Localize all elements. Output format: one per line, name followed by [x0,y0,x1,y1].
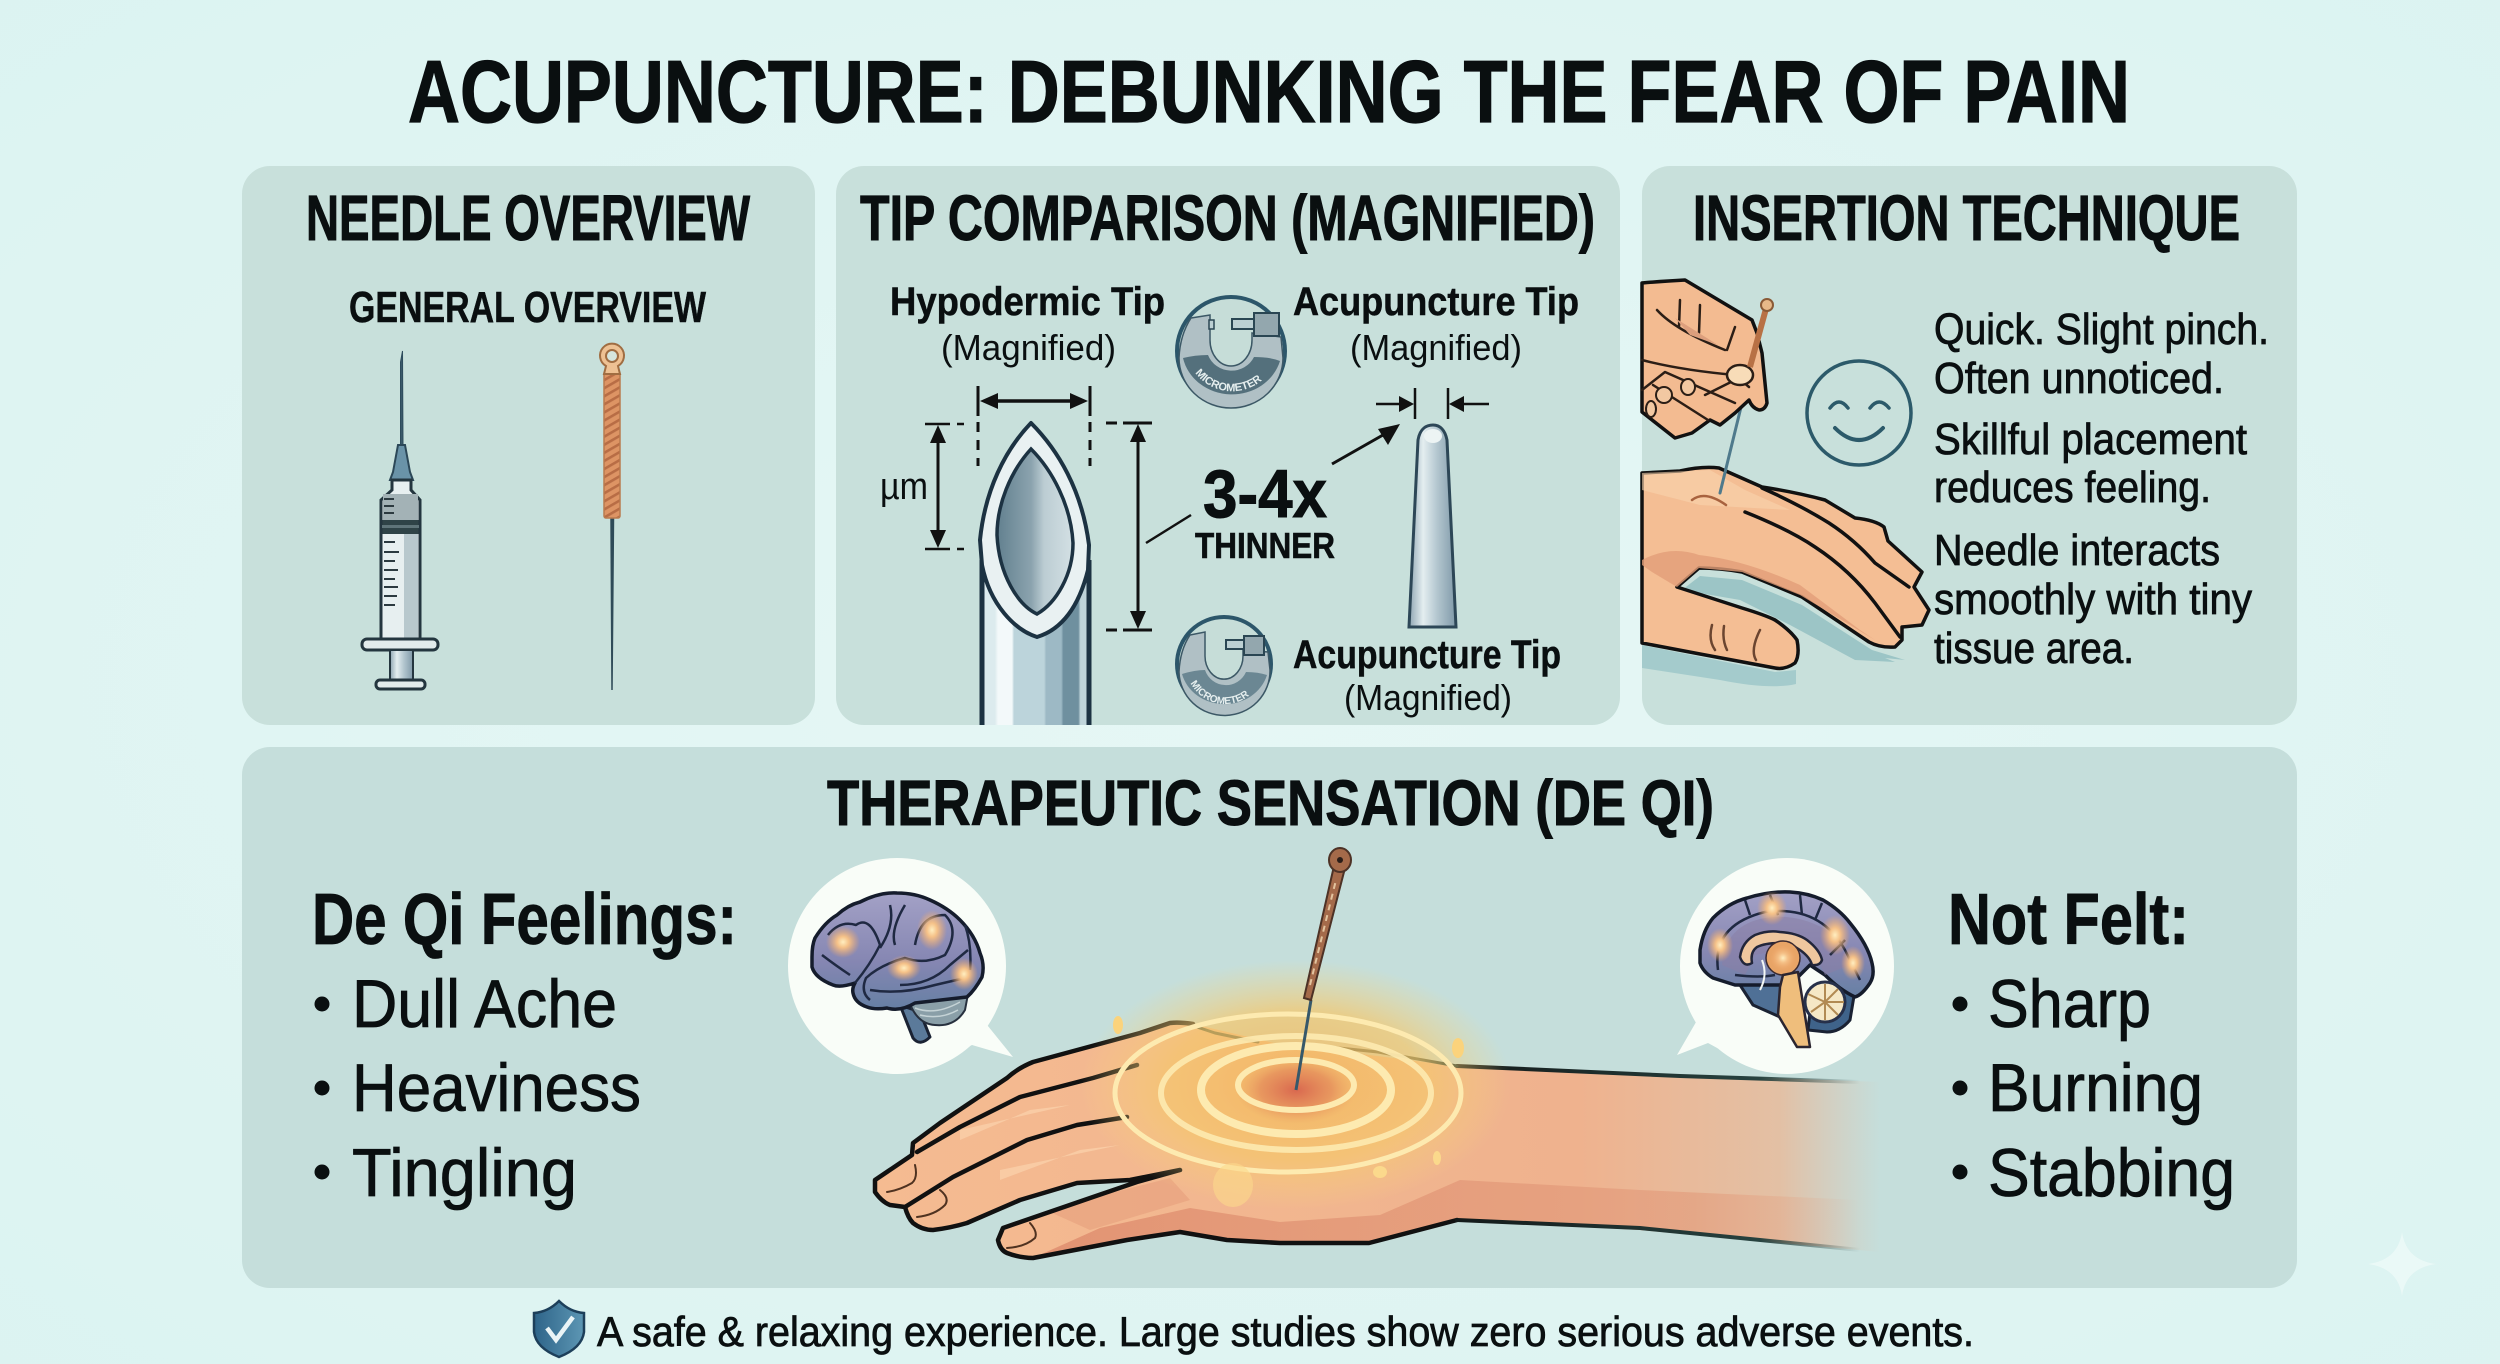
list: not felt: Stabbing [1988,1135,2235,1211]
list: not felt: Not Felt: [1948,880,2189,960]
title: ACUPUNCTURE: DEBUNKING THE FEAR OF PAIN [408,42,2130,141]
subheading: general overview: GENERAL OVERVIEW [349,283,706,332]
diagram: acupuncture needle tip [1409,425,1456,627]
text block: insertion points: Skillful placement [1934,415,2247,464]
panel: insertion technique [1642,166,2297,725]
text block: insertion points: Quick. Slight pinch. [1934,305,2269,354]
panel: needle overview [242,166,815,725]
dimension: acupuncture width [1376,388,1489,419]
heading: insertion technique: INSERTION TECHNIQUE [1693,182,2240,254]
list: de qi feelings: Dull Ache [352,966,617,1042]
label: acupuncture tip top: (Magnified) [1350,327,1522,368]
icon: syringe [362,351,438,689]
effect: glowing rings [1081,960,1511,1210]
list: de qi feelings [312,880,737,1211]
callout: 3-4x thinner: THINNER [1195,525,1335,566]
label: hypodermic tip [890,280,1165,368]
list: de qi feelings: De Qi Feelings: [312,880,737,960]
icon: acupuncture needle [600,344,624,690]
icon: micrometer bottom: MICROMETER [1190,680,1250,704]
list: not felt: Burning [1988,1050,2203,1126]
text block: insertion points: reduces feeling. [1934,463,2211,512]
icon: micrometer top [1175,295,1287,409]
diagram: hypodermic needle tip [980,423,1089,725]
icon: smiley face [1807,361,1911,465]
text block: insertion points: tissue area. [1934,624,2134,673]
label: acupuncture tip top [1293,280,1579,368]
label: acupuncture tip bottom: Acupuncture Tip [1293,633,1561,677]
callout: 3-4x thinner [1146,456,1335,566]
speech bubble: left brain [788,858,1013,1074]
label: hypodermic tip: (Magnified) [941,327,1116,368]
icon: micrometer bottom [1175,615,1273,716]
dimension: hypodermic width [978,386,1090,466]
label: hypodermic tip: Hypodermic Tip [890,280,1165,324]
panel: tip comparison [836,166,1620,725]
callout: 3-4x thinner: 3-4x [1203,456,1327,532]
arrow: to acupuncture tip [1332,424,1400,464]
icon: brain cross-section [1700,891,1873,1047]
text block: insertion points [1934,305,2269,673]
list: not felt: Sharp [1988,966,2151,1042]
icon: micrometer top: MICROMETER [1196,368,1262,392]
text block: insertion points: Often unnoticed. [1934,354,2224,403]
text block: insertion points: smoothly with tiny [1934,575,2252,624]
illustration: needle held in hand [1642,280,1773,493]
panel: therapeutic sensation [242,747,2297,1288]
footer note: A safe & relaxing experience. Large studies show zero serious adverse events. [597,1308,1974,1355]
illustration: forearm and hand [875,1023,1880,1258]
dimension: micrometre height: µm [880,466,928,508]
heading: needle overview: NEEDLE OVERVIEW [306,182,750,254]
watermark sparkle [2368,1232,2436,1296]
list: not felt [1948,880,2235,1211]
list: de qi feelings: Heaviness [352,1050,641,1126]
list: de qi feelings: Tingling [352,1135,577,1211]
dimension: right height [1106,423,1152,630]
icon: brain exterior [812,893,983,1042]
illustration: inserted needle [1296,848,1351,1090]
text block: insertion points: Needle interacts [1934,526,2220,575]
label: acupuncture tip bottom: (Magnified) [1344,677,1512,718]
heading: tip comparison: TIP COMPARISON (MAGNIFIED) [860,182,1595,254]
label: acupuncture tip top: Acupuncture Tip [1293,280,1579,324]
label: acupuncture tip bottom [1293,633,1561,718]
dimension: micrometre height [880,424,964,549]
heading: therapeutic sensation: THERAPEUTIC SENSATION (DE QI) [827,767,1714,839]
icon: shield [534,1301,584,1357]
speech bubble: right brain [1677,858,1894,1074]
illustration: lower hand [1642,467,1929,686]
